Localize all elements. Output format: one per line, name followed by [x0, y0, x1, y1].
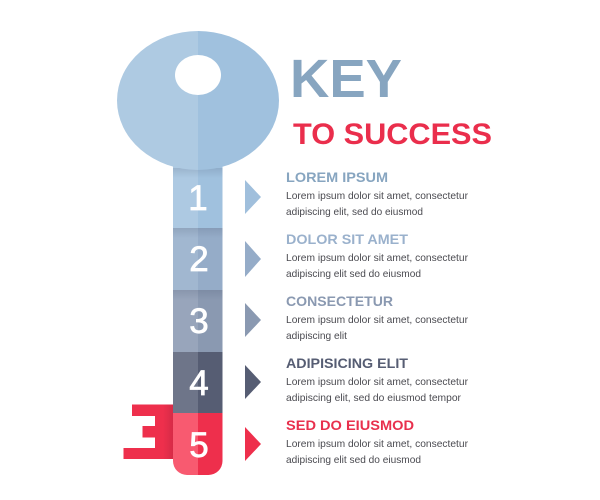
segment 5: [173, 413, 222, 475]
key shaft: [173, 160, 222, 475]
key head: [117, 31, 279, 170]
text block 5: adipiscing elit sed do eiusmod: [286, 454, 421, 466]
text block 2: DOLOR SIT AMET: [286, 231, 408, 247]
number 2: 2: [189, 240, 209, 279]
text block 4: Lorem ipsum dolor sit amet, consectetur: [286, 376, 468, 388]
arrow 4: [245, 365, 261, 399]
text block 1: Lorem ipsum dolor sit amet, consectetur: [286, 190, 468, 202]
text block 4: adipiscing elit, sed do eiusmod tempor: [286, 392, 461, 404]
text block 2: adipiscing elit sed do eiusmod: [286, 268, 421, 280]
text block 2: Lorem ipsum dolor sit amet, consectetur: [286, 252, 468, 264]
text block 3: adipiscing elit: [286, 330, 347, 342]
text block 1: LOREM IPSUM: [286, 169, 388, 185]
number 1: 1: [188, 179, 208, 218]
key teeth: [124, 404, 173, 459]
text block 2: [286, 231, 468, 280]
arrow 3: [245, 303, 261, 337]
text block 4: [286, 355, 468, 404]
text block 4: ADIPISICING ELIT: [286, 355, 408, 371]
key hole: [175, 55, 221, 95]
text block 5: Lorem ipsum dolor sit amet, consectetur: [286, 438, 468, 450]
title: to success: TO SUCCESS: [293, 118, 492, 151]
text block 3: CONSECTETUR: [286, 293, 393, 309]
text block 3: [286, 293, 468, 342]
number 3: 3: [189, 302, 209, 341]
number 4: 4: [189, 364, 209, 403]
segment 3: [173, 290, 222, 352]
arrow 5: [245, 427, 261, 461]
text block 1: [286, 169, 468, 218]
title: key: KEY: [290, 49, 402, 109]
segment 1: [173, 160, 222, 228]
text block 5: [286, 417, 468, 466]
text block 1: adipiscing elit, sed do eiusmod: [286, 206, 423, 218]
arrow 1: [245, 180, 261, 214]
text block 5: SED DO EIUSMOD: [286, 417, 414, 433]
number 5: 5: [189, 426, 209, 465]
arrow 2: [245, 241, 261, 277]
segment 2: [173, 228, 222, 290]
text block 3: Lorem ipsum dolor sit amet, consectetur: [286, 314, 468, 326]
segment 4: [173, 352, 222, 413]
